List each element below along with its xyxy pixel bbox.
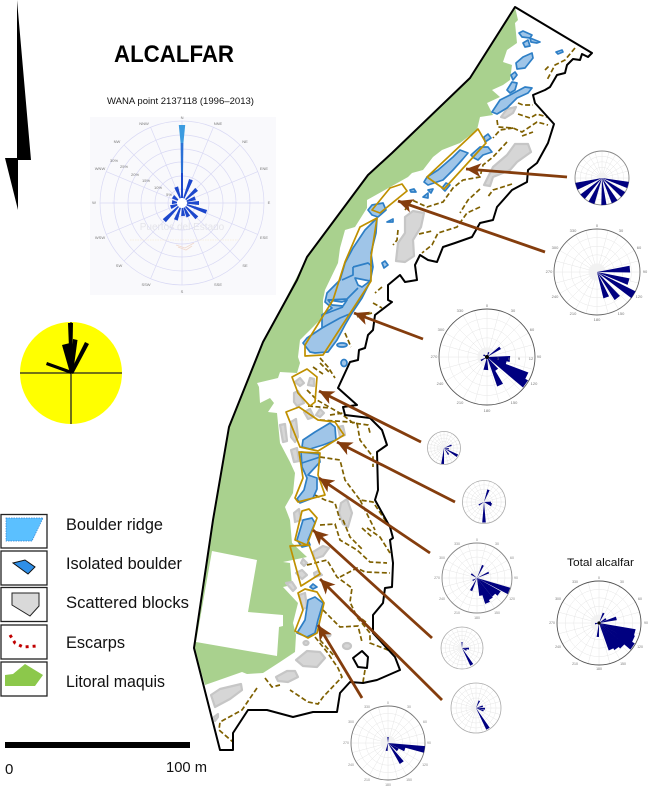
rose 9: 270 — [343, 741, 349, 745]
rose 9: 330 — [364, 705, 370, 709]
total rose: 150 — [620, 662, 626, 666]
total rose — [549, 576, 648, 671]
WANA wave rose chart: WNW — [95, 166, 105, 171]
scale bar: 0 — [5, 761, 13, 778]
rose 6: 90 — [514, 576, 518, 580]
WANA wave rose chart: SW — [116, 263, 122, 268]
rose 6: 300 — [439, 556, 445, 560]
legend: isolated boulder — [1, 551, 183, 585]
rose 3: 180 — [484, 408, 491, 413]
rose 2: 240 — [552, 294, 559, 299]
legend — [1, 514, 189, 696]
arrow 8 — [320, 579, 442, 700]
rose 2 — [546, 223, 648, 322]
WANA wave rose chart: SSW — [141, 282, 151, 287]
scale bar — [5, 742, 207, 778]
rose 2: 60 — [637, 245, 642, 250]
rose 9: 120 — [422, 763, 428, 767]
total rose: 270 — [549, 621, 555, 625]
litoral maquis area — [194, 7, 518, 685]
rose 6: 240 — [439, 597, 445, 601]
arrows and sector roses — [313, 151, 648, 787]
legend: boulder ridge: Boulder ridge — [66, 516, 163, 534]
rose 2: 120 — [636, 294, 643, 299]
legend: boulder ridge — [1, 514, 163, 548]
total rose: 120 — [637, 645, 643, 649]
rose 3: 9 — [518, 356, 521, 361]
rose 3: 3 — [497, 356, 500, 361]
rose 1 — [575, 151, 629, 205]
total rose: 330 — [572, 580, 578, 584]
WANA wave rose chart — [90, 115, 276, 295]
rose 2: 0 — [596, 223, 599, 228]
WANA wave rose chart: E — [268, 200, 271, 205]
rose 7 — [441, 627, 483, 669]
rose 3: 60 — [530, 327, 535, 332]
WANA wave rose chart: WSW — [95, 235, 105, 240]
WANA wave rose chart: SE — [242, 263, 248, 268]
WANA wave rose chart: NE — [242, 139, 248, 144]
legend: scattered blocks: Scattered blocks — [66, 594, 189, 612]
arrow 2 — [398, 201, 545, 252]
study area boundary — [194, 7, 592, 750]
rose 5 — [462, 480, 506, 524]
rose 3: 30 — [511, 308, 516, 313]
legend: litoral maquis: Litoral maquis — [66, 673, 165, 691]
rose 2: 270 — [546, 269, 553, 274]
rose 9: 300 — [348, 720, 354, 724]
arrow 9 — [318, 625, 362, 698]
legend: escarps — [1, 625, 125, 659]
total rose: 240 — [555, 645, 561, 649]
WANA wave rose chart: S — [181, 289, 184, 294]
WANA wave rose chart: N — [181, 115, 184, 120]
total rose: 210 — [572, 662, 578, 666]
WANA wave rose chart: SSE — [214, 282, 222, 287]
arrow 4 — [319, 391, 421, 442]
study sector outlines — [286, 129, 486, 638]
north arrow — [5, 0, 31, 210]
legend: litoral maquis — [1, 662, 165, 696]
rose 3: 90 — [537, 354, 542, 359]
rose 4 — [428, 432, 460, 464]
arrow 1 — [466, 169, 567, 177]
total rose: 0 — [598, 576, 600, 580]
rose 6: 120 — [509, 597, 515, 601]
WANA wave rose chart: 15% — [142, 178, 150, 183]
rose 9: 60 — [423, 720, 427, 724]
rose 2: 90 — [643, 269, 648, 274]
WANA wave rose chart: Puertos del Estado — [140, 222, 225, 233]
WANA wave rose chart: 25% — [120, 164, 128, 169]
wave rose heading: WANA point 2137118 (1996–2013) — [107, 96, 254, 107]
arrow 7 — [313, 530, 432, 638]
rose 6: 180 — [474, 616, 480, 620]
rose 9: 240 — [348, 763, 354, 767]
rose 2: 30 — [619, 228, 624, 233]
total rose: 300 — [555, 597, 561, 601]
rose 9: 150 — [406, 778, 412, 782]
WANA wave rose chart: ENE — [260, 166, 268, 171]
title: ALCALFAR — [114, 41, 234, 68]
rose 3: 0 — [486, 303, 489, 308]
rose 3: 270 — [431, 354, 438, 359]
rose 3: 300 — [438, 327, 445, 332]
rose 3: 6 — [508, 356, 511, 361]
rose 2: 330 — [570, 228, 577, 233]
rose 2: 150 — [618, 311, 625, 316]
rose 2: 300 — [552, 245, 559, 250]
WANA wave rose chart: 5% — [166, 192, 172, 197]
rose 8 — [451, 683, 501, 733]
rose 3: 330 — [457, 308, 464, 313]
WANA wave rose chart: NNW — [139, 121, 149, 126]
WANA wave rose chart: 20% — [131, 172, 139, 177]
legend: escarps: Escarps — [66, 634, 125, 652]
rose 6: 30 — [495, 542, 499, 546]
cleared white area — [196, 551, 283, 656]
rose 2: 210 — [570, 311, 577, 316]
rose 9: 0 — [387, 701, 389, 705]
rose 3: 12 — [529, 356, 534, 361]
arrow 6 — [319, 478, 430, 553]
WANA wave rose chart: 30% — [110, 158, 118, 163]
total rose: 60 — [638, 597, 642, 601]
rose 3: 120 — [531, 381, 538, 386]
total rose heading: Total alcalfar — [567, 557, 634, 569]
map — [194, 7, 592, 750]
rose 3: 240 — [437, 381, 444, 386]
rose 3: 210 — [457, 400, 464, 405]
rose 3 — [431, 303, 542, 413]
legend: isolated boulder: Isolated boulder — [66, 555, 183, 573]
rose 6: 210 — [454, 611, 460, 615]
arrow 3 — [354, 313, 423, 339]
rose 6: 60 — [510, 556, 514, 560]
escarps — [219, 48, 575, 742]
rose 6: 270 — [434, 576, 440, 580]
rose 2: 180 — [594, 317, 601, 322]
rose 9 — [343, 701, 431, 787]
rose 6: 330 — [454, 542, 460, 546]
rose 6 — [434, 538, 518, 620]
WANA wave rose chart: ESE — [260, 235, 268, 240]
rose 9: 30 — [407, 705, 411, 709]
WANA wave rose chart: NNE — [214, 121, 223, 126]
total rose: 180 — [596, 667, 602, 671]
rose 6: 150 — [494, 611, 500, 615]
rose 9: 90 — [427, 741, 431, 745]
rose 9: 180 — [385, 783, 391, 787]
scale bar: 100 m — [166, 759, 207, 776]
WANA wave rose chart: 10% — [154, 185, 162, 190]
WANA wave rose chart: NW — [114, 139, 121, 144]
boulder ridges and isolated boulders — [297, 31, 563, 637]
rose 3: 150 — [511, 400, 518, 405]
scattered blocks — [211, 107, 531, 721]
rose 6: 0 — [476, 538, 478, 542]
rose 9: 210 — [364, 778, 370, 782]
total rose: 30 — [620, 580, 624, 584]
wind rose: yellow disc — [20, 322, 122, 424]
total rose: 90 — [644, 621, 648, 625]
legend: scattered blocks — [1, 588, 189, 622]
WANA wave rose chart: W — [92, 200, 96, 205]
arrow 5 — [337, 442, 455, 502]
